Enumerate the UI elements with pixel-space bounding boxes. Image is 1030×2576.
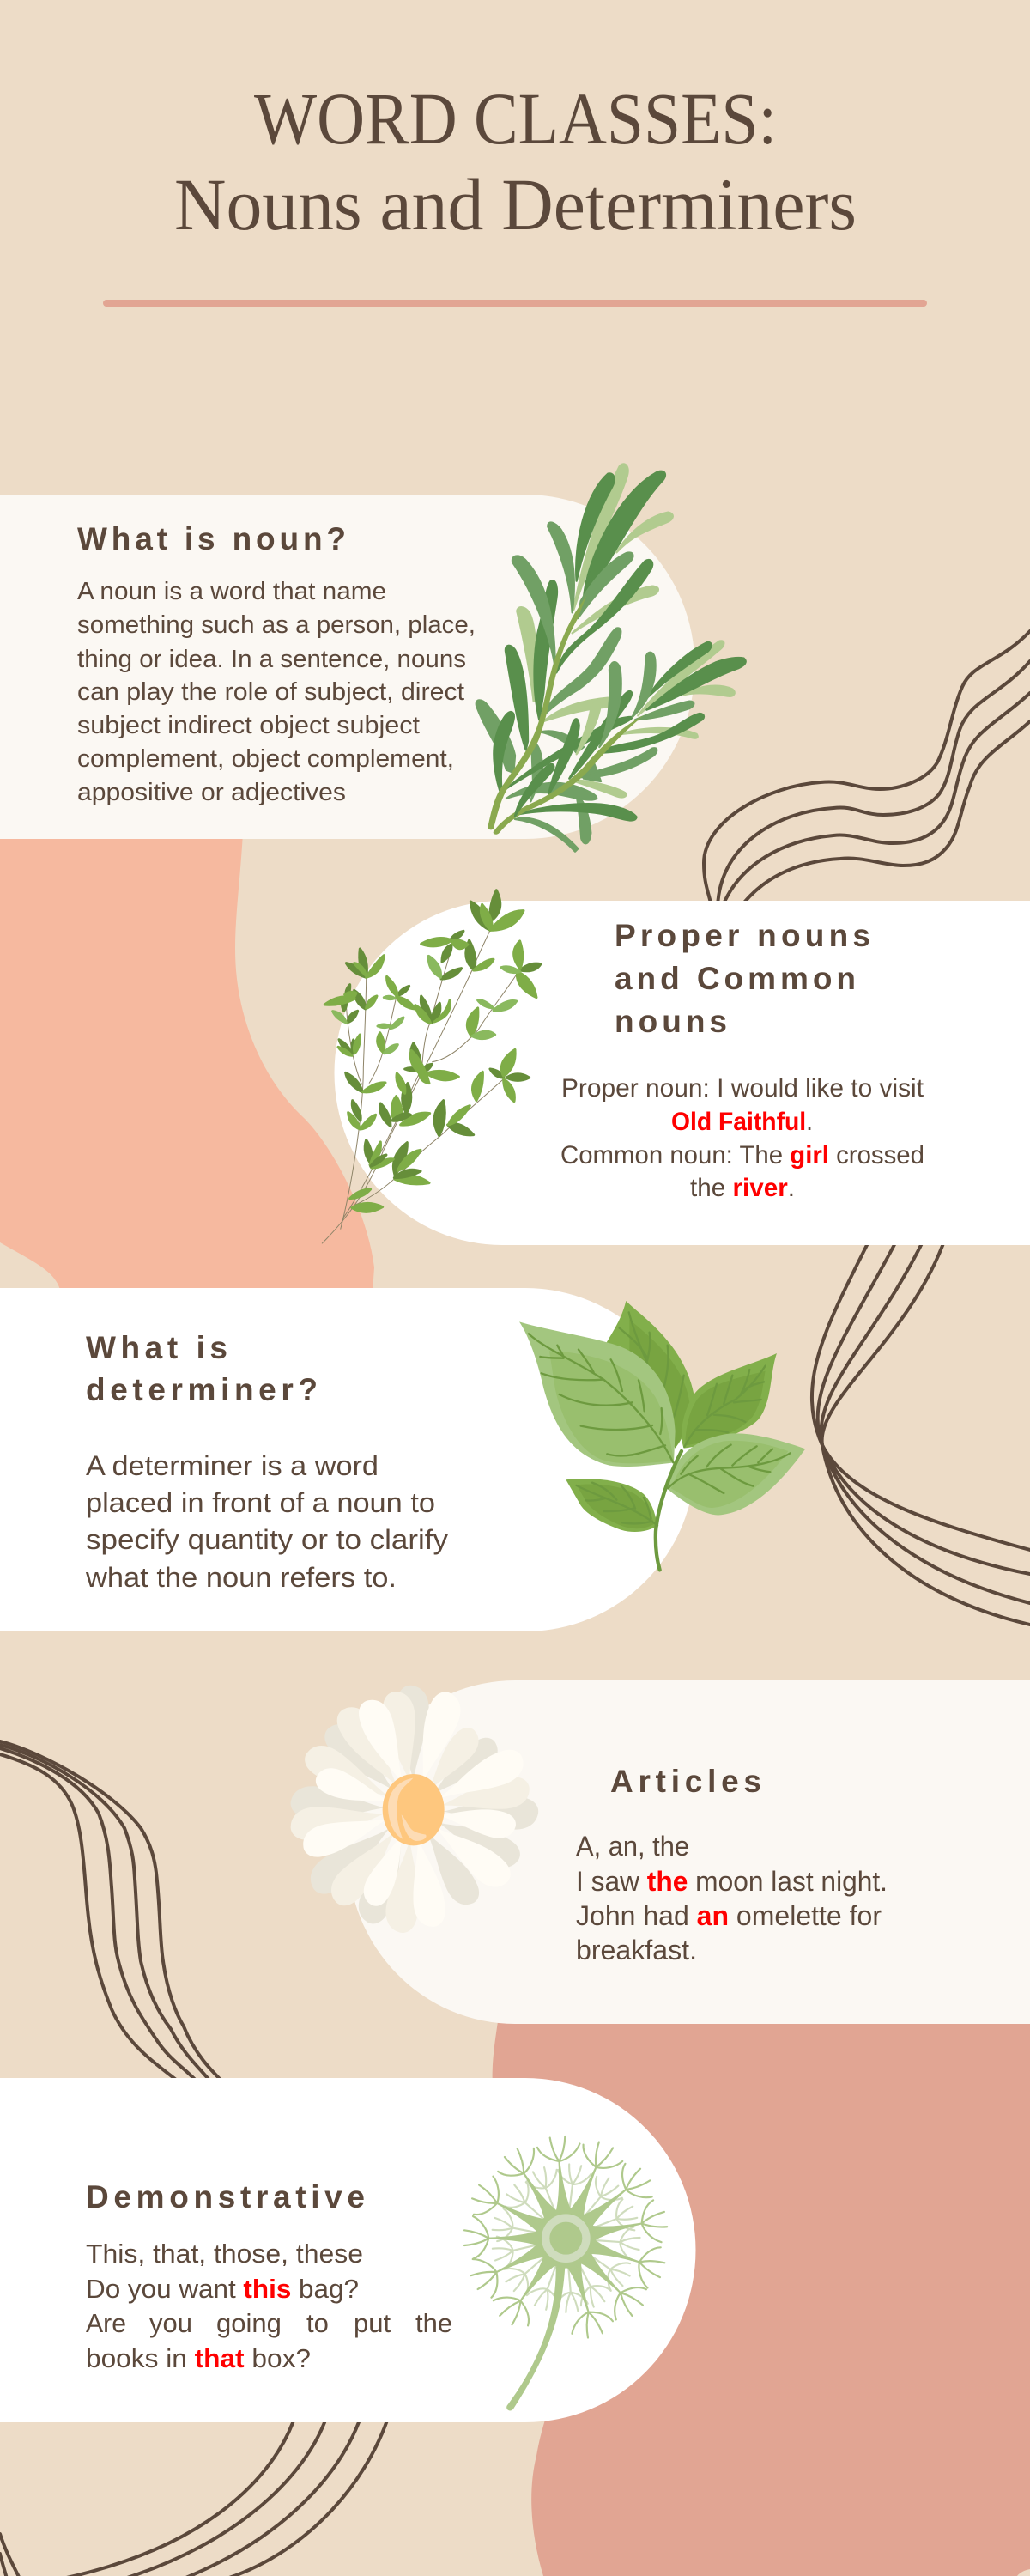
text: proper and common noun examples: Old Faithful. <box>671 1108 813 1136</box>
text: demonstrative examples: This, that, those, these <box>86 2239 363 2269</box>
icon: thyme sprig <box>322 890 541 1243</box>
text: noun definition: appositive or adjectives <box>77 779 346 806</box>
squiggle: bottom lines <box>0 2413 390 2576</box>
text: noun definition <box>77 578 476 806</box>
text: determiner definition: specify quantity or to clarify <box>86 1524 448 1555</box>
panel: what is determiner <box>0 1288 695 1631</box>
panel: what is noun <box>0 495 694 839</box>
text: determiner definition <box>85 1450 448 1593</box>
text: noun definition: can play the role of subject, direct <box>77 678 464 706</box>
icon: green leaves <box>519 1301 805 1570</box>
text: proper and common noun examples: Proper noun: I would like to visit <box>561 1074 924 1103</box>
icon: dandelion <box>464 2136 670 2410</box>
seed head <box>536 2208 596 2269</box>
squiggle: upper right lines <box>704 631 1030 910</box>
panel: proper and common nouns <box>335 901 1030 1245</box>
text: determiner definition: placed in front of a noun to <box>86 1487 435 1518</box>
heading: proper and common nouns: nouns <box>615 1004 727 1039</box>
text: demonstrative examples: to <box>306 2308 329 2338</box>
heading: what is noun: What is noun? <box>77 521 346 556</box>
heading: demonstrative: Demonstrative <box>86 2179 365 2215</box>
text: determiner definition: A determiner is a word <box>86 1450 379 1481</box>
text: determiner definition: what the noun refers to. <box>85 1562 397 1593</box>
text: proper and common noun examples <box>560 1074 924 1202</box>
text: noun definition: complement, object complement, <box>77 745 454 773</box>
leaf: small left <box>566 1479 657 1532</box>
text: demonstrative examples: going <box>216 2308 282 2338</box>
text: demonstrative examples: put <box>354 2308 391 2338</box>
title <box>174 77 857 246</box>
text: noun definition: thing or idea. In a sentence, nouns <box>77 646 466 673</box>
icon: daisy flower <box>288 1686 539 1935</box>
text: demonstrative examples: Do you want this bag? <box>86 2274 359 2304</box>
text: demonstrative examples: Are <box>86 2308 126 2338</box>
text: proper and common noun examples: Common noun: The girl crossed <box>560 1141 924 1170</box>
text: article examples: John had an omelette for <box>576 1900 882 1931</box>
leaf: back top <box>607 1301 694 1449</box>
heading: articles: Articles <box>610 1764 761 1799</box>
rose blob <box>493 2009 1030 2576</box>
title: WORD CLASSES: <box>254 77 777 160</box>
panel: articles <box>348 1680 1030 2024</box>
text: demonstrative examples: the <box>415 2308 452 2338</box>
text: article examples <box>576 1831 888 1965</box>
heading: proper and common nouns: Proper nouns <box>615 918 870 953</box>
leaf: right <box>682 1353 777 1449</box>
heading: what is determiner <box>86 1330 318 1407</box>
peach blob <box>0 833 374 1292</box>
leaf stem <box>656 1451 682 1570</box>
icon: rosemary sprig <box>476 464 746 852</box>
text: noun definition: subject indirect object subject <box>77 712 420 739</box>
heading: what is determiner: What is <box>86 1330 227 1365</box>
heading: what is determiner: determiner? <box>86 1372 318 1407</box>
heading: proper and common nouns: and Common <box>615 961 856 996</box>
title: Nouns and Determiners <box>174 163 857 246</box>
text: demonstrative examples: you <box>149 2308 192 2338</box>
title divider <box>103 300 927 307</box>
outer seeds <box>464 2136 670 2342</box>
text: article examples: A, an, the <box>576 1831 689 1862</box>
leaf: big left <box>519 1321 676 1467</box>
text: proper and common noun examples: the river. <box>690 1174 795 1202</box>
squiggle: left lines <box>0 1741 227 2087</box>
text: noun definition: A noun is a word that name <box>77 578 386 605</box>
white petals <box>299 1688 530 1929</box>
text: demonstrative examples <box>86 2239 452 2373</box>
text: article examples: breakfast. <box>576 1935 697 1965</box>
squiggle: middle right lines <box>812 1236 1030 1625</box>
leaf: lower right <box>667 1433 805 1516</box>
inner light seeds <box>490 2163 641 2313</box>
flower centre <box>383 1774 445 1845</box>
cream petals <box>288 1689 532 1935</box>
heading: proper and common nouns <box>615 918 870 1039</box>
dandelion stem <box>506 2267 565 2410</box>
panel: demonstrative <box>0 2078 695 2422</box>
grey petals <box>289 1686 539 1929</box>
text: article examples: I saw the moon last night. <box>576 1866 888 1897</box>
text: noun definition: something such as a person, place, <box>77 611 476 639</box>
text: demonstrative examples: books in that box? <box>86 2343 311 2373</box>
